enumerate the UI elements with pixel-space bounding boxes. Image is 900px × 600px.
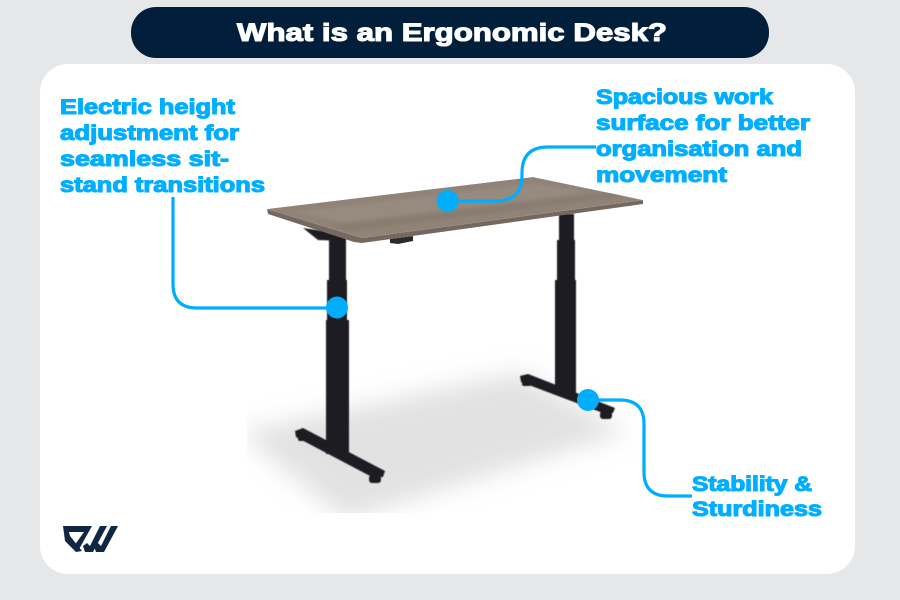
- callout text: organisation and: [596, 138, 802, 161]
- callout text: Electric height: [60, 96, 235, 119]
- callout text: Spacious work: [596, 86, 773, 109]
- title bar: [131, 7, 769, 58]
- callout text: seamless sit-: [60, 148, 229, 171]
- marker dot: [577, 389, 599, 411]
- callout text: Stability &: [692, 473, 812, 496]
- callout text: [60, 96, 265, 197]
- callout text: [692, 473, 822, 521]
- main white panel: [40, 64, 855, 574]
- leader line: [173, 197, 337, 308]
- callout text: [596, 86, 810, 187]
- callout text: movement: [596, 164, 727, 187]
- marker dot: [326, 296, 348, 318]
- callout text: stand transitions: [60, 174, 265, 197]
- wood desktop edge: [267, 200, 643, 243]
- floor shadow: [240, 372, 628, 520]
- wood desktop top: [267, 177, 643, 238]
- callout text: adjustment for: [60, 122, 239, 145]
- right leg: [520, 214, 615, 419]
- title bar: What is an Ergonomic Desk?: [237, 19, 667, 47]
- callout: spacious work surface: [436, 86, 810, 212]
- callout text: surface for better: [596, 112, 810, 135]
- leader line: [447, 147, 596, 201]
- logo: [63, 526, 118, 552]
- marker dot: [436, 190, 458, 212]
- leader line: [588, 400, 692, 496]
- callout: stability and sturdiness: [577, 389, 822, 521]
- left leg: [295, 228, 385, 483]
- desktop control box: [390, 236, 413, 244]
- callout text: Sturdiness: [692, 498, 822, 521]
- desk illustration: [240, 177, 643, 520]
- callout: electric height adjustment: [60, 96, 348, 318]
